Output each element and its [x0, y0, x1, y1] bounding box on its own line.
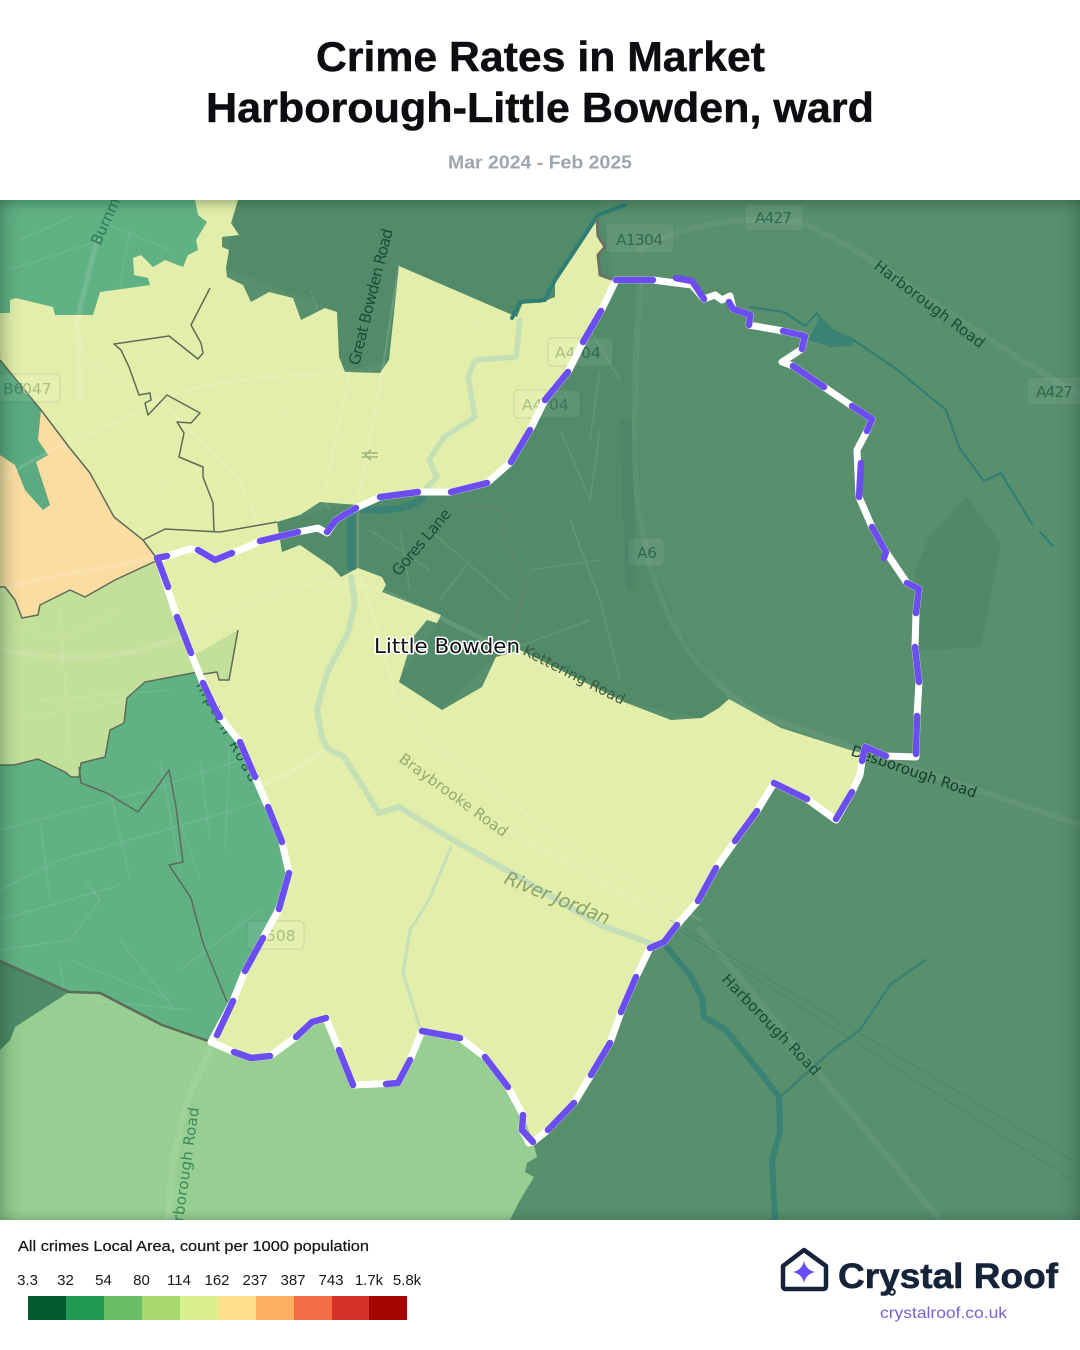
legend tick labels: 387	[280, 1272, 306, 1289]
legend tick labels: 162	[204, 1272, 230, 1289]
road labels: River Jordan	[501, 867, 613, 930]
region: mid green west wedge	[0, 360, 50, 510]
rivers on dark ground	[351, 205, 1053, 1220]
road labels: 04	[549, 396, 569, 414]
road labels: A1304	[616, 231, 663, 249]
road labels: A4	[555, 344, 575, 362]
region: light green triangle	[196, 630, 237, 680]
region: sage green south	[0, 992, 537, 1220]
legend tick labels: 3.3	[17, 1272, 38, 1289]
legend tick labels: 114	[167, 1272, 191, 1289]
region: mid green south-west	[0, 672, 289, 1042]
road labels: Desborough Road	[849, 742, 979, 802]
road labels: A6	[637, 544, 657, 562]
road labels: Braybrooke Road	[396, 750, 511, 841]
legend	[17, 1238, 422, 1320]
road labels: B6	[3, 380, 24, 398]
major roads	[0, 220, 1080, 1220]
icon: house with star	[783, 1250, 826, 1289]
road shields	[0, 204, 1080, 949]
road labels: Harborough Road	[871, 257, 988, 352]
road labels: A427	[1036, 383, 1073, 401]
minor roads	[0, 215, 620, 1020]
road labels: Kettering Road	[520, 643, 627, 708]
legend title: All crimes Local Area, count per 1000 population	[18, 1238, 369, 1255]
road labels: A427	[755, 209, 792, 227]
road labels: rborough Road	[169, 1106, 203, 1223]
rail station symbol	[362, 450, 378, 460]
road labels	[3, 145, 1073, 1223]
logo: Crystal Roof	[783, 1250, 1058, 1322]
road labels: 508	[266, 927, 296, 945]
region: mid green north-west	[0, 200, 207, 315]
road labels: 047	[22, 380, 52, 398]
road labels: Gores Lane	[388, 505, 455, 580]
legend tick labels: 1.7k	[355, 1272, 384, 1289]
subtitle: date range: Mar 2024 - Feb 2025	[448, 152, 632, 172]
road labels: 04	[581, 344, 601, 362]
title: Crime Rates in Market	[316, 33, 765, 80]
wordmark: Crystal Roof	[838, 1257, 1058, 1296]
title	[206, 33, 874, 131]
rail line and faint marks	[670, 920, 1080, 1185]
legend tick labels: 80	[133, 1272, 150, 1289]
road labels: Great Bowden Road	[345, 227, 397, 367]
legend colour scale	[28, 1296, 407, 1320]
ward outline: purple dashes	[157, 278, 919, 1142]
ward outline: white base	[158, 280, 919, 1143]
title: Harborough-Little Bowden, ward	[206, 84, 874, 131]
river jordan, pale section	[317, 320, 655, 1028]
region: dark strip beside bypass	[619, 420, 636, 590]
road labels: A4	[522, 396, 542, 414]
map: crime rate choropleth	[0, 145, 1080, 1223]
legend tick labels: 32	[57, 1272, 74, 1289]
place label: Little Bowden: Little Bowden	[374, 634, 520, 658]
legend tick labels: 743	[318, 1272, 344, 1289]
legend tick labels: 5.8k	[393, 1272, 422, 1289]
road labels: mpton Road	[193, 679, 261, 785]
website url: crystalroof.co.uk	[880, 1305, 1008, 1322]
legend tick labels	[17, 1272, 422, 1289]
road labels: Harborough Road	[718, 970, 824, 1079]
region: light green west	[0, 560, 198, 777]
region: dark south-west corner	[0, 961, 69, 1050]
region: woodland east	[915, 497, 1001, 651]
legend tick labels: 54	[95, 1272, 112, 1289]
legend tick labels: 237	[242, 1272, 268, 1289]
ward boundary lines	[0, 218, 614, 1042]
region: pale yellow-green ward and town	[0, 200, 862, 1142]
road labels: Burnmill Road	[87, 145, 146, 248]
region: orange town centre	[0, 410, 158, 618]
region: darker west neighbourhood	[226, 200, 729, 718]
